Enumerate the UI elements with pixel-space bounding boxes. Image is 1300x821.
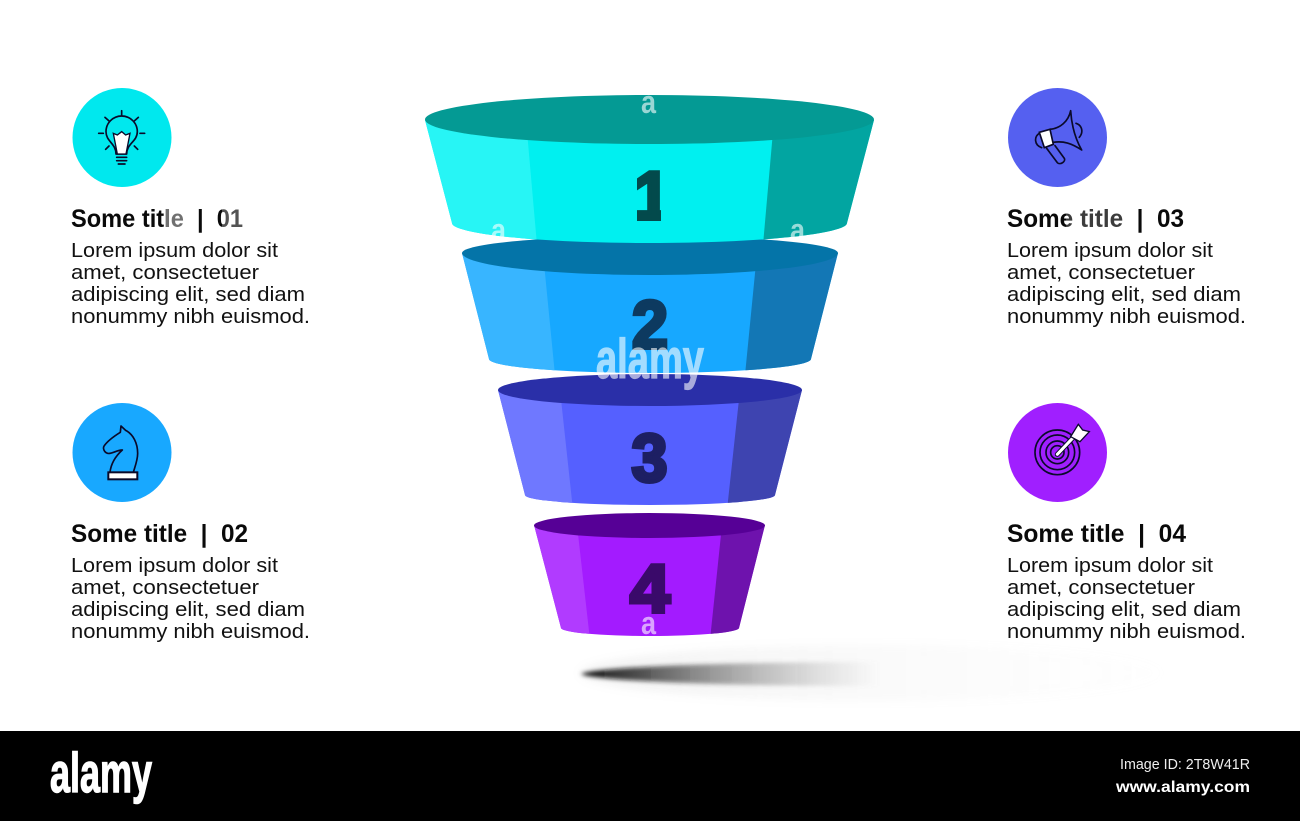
text block: adipiscing elit, sed diam	[71, 598, 305, 621]
heading: Some title | 01	[71, 205, 243, 233]
text block	[1007, 239, 1246, 328]
funnel segment 1	[420, 95, 880, 245]
funnel segment 3	[495, 374, 805, 510]
footer bar	[0, 731, 1300, 821]
funnel segment 4: 4	[630, 551, 670, 627]
icon: chess knight	[72, 403, 172, 502]
watermark: a	[790, 212, 805, 248]
watermark: a	[641, 84, 656, 120]
text block: amet, consectetuer	[71, 261, 259, 284]
text block: Lorem ipsum dolor sit	[71, 554, 278, 577]
heading: Some title | 02	[71, 520, 248, 548]
panel: step 04	[1007, 403, 1246, 643]
funnel segment 2: 2	[632, 287, 668, 363]
panel: step 01	[71, 88, 310, 328]
watermark: a	[641, 605, 656, 641]
funnel shadow	[580, 645, 1160, 701]
funnel segment 3: 3	[632, 420, 668, 496]
watermark	[166, 84, 1126, 641]
funnel segment 2	[460, 236, 840, 375]
text block: nonummy nibh euismod.	[71, 620, 310, 643]
text block: amet, consectetuer	[1007, 261, 1195, 284]
text block: nonummy nibh euismod.	[1007, 305, 1246, 328]
text block: amet, consectetuer	[1007, 576, 1195, 599]
footer logo: alamy	[50, 741, 152, 804]
text block: nonummy nibh euismod.	[71, 305, 310, 328]
watermark: a	[491, 212, 506, 248]
heading: Some title | 04	[1007, 520, 1186, 548]
panel: step 03	[1007, 88, 1246, 328]
image id: Image ID: 2T8W41R	[1120, 756, 1250, 773]
panel: step 02	[71, 403, 310, 643]
text block: Lorem ipsum dolor sit	[1007, 554, 1213, 577]
text block	[1007, 554, 1246, 643]
text block: Lorem ipsum dolor sit	[1007, 239, 1213, 262]
website: www.alamy.com	[1115, 779, 1250, 796]
text block: adipiscing elit, sed diam	[1007, 283, 1241, 306]
text block: adipiscing elit, sed diam	[71, 283, 305, 306]
text block	[71, 239, 310, 328]
text block	[71, 554, 310, 643]
heading: Some title | 03	[1007, 205, 1184, 233]
text block: Lorem ipsum dolor sit	[71, 239, 278, 262]
text block: nonummy nibh euismod.	[1007, 620, 1246, 643]
text block: amet, consectetuer	[71, 576, 259, 599]
funnel segment 4	[530, 513, 770, 640]
icon: target	[1008, 403, 1107, 502]
text block: adipiscing elit, sed diam	[1007, 598, 1241, 621]
icon: light bulb	[72, 88, 172, 187]
icon: megaphone	[1008, 88, 1107, 187]
funnel	[420, 95, 880, 640]
funnel segment 1: 1	[634, 158, 670, 234]
watermark: alamy	[596, 327, 704, 390]
